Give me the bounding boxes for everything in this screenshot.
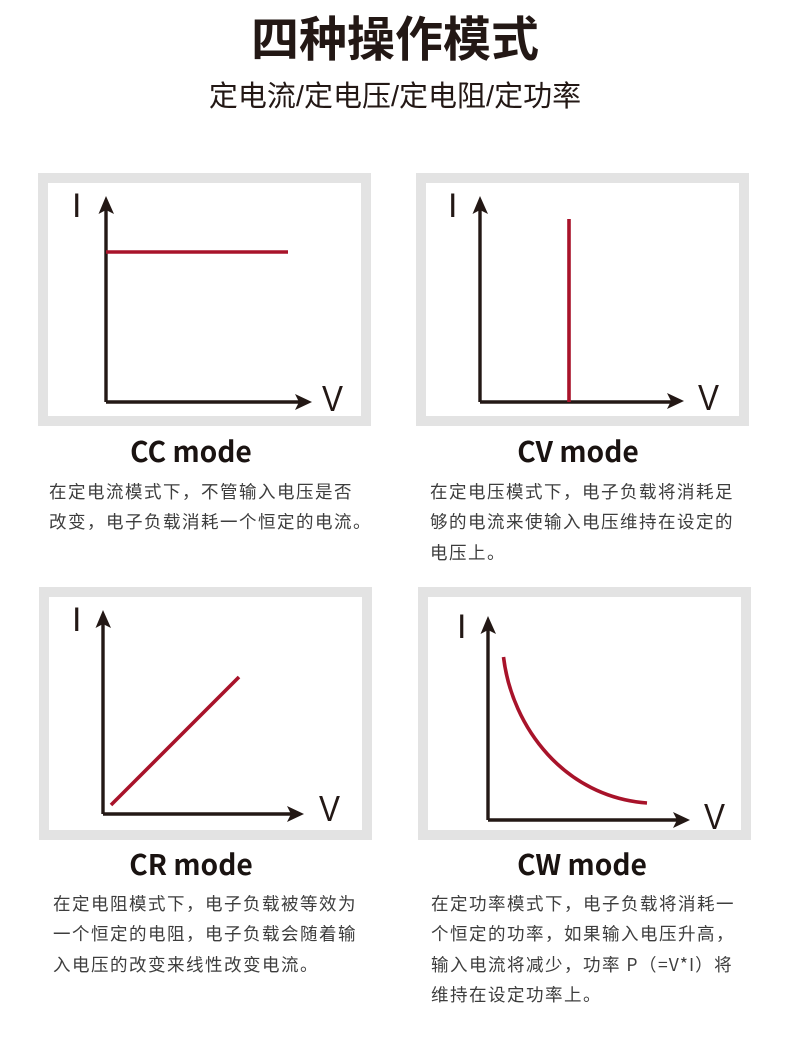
panel: CW chart (418, 587, 751, 840)
heading: CC mode: CC mode (130, 430, 252, 471)
text: CR description: 在定电阻模式下，电子负载被等效为 (53, 891, 357, 916)
text: CW description: 输入电流将减少，功率 P（=V*I）将 (431, 952, 733, 977)
text: CC description (49, 479, 372, 534)
subtitle: 定电流/定电压/定电阻/定功率 (209, 81, 581, 113)
chart: CR mode curve: V (319, 788, 340, 829)
chart: CC mode curve: V (322, 378, 343, 419)
text: CC description: 在定电流模式下，不管输入电压是否 (49, 479, 353, 504)
heading: CV mode: CV mode (517, 430, 639, 471)
text: CW description: 在定功率模式下，电子负载将消耗一 (431, 891, 735, 916)
chart: CR mode curve: I (72, 601, 81, 639)
text: CR description: 入电压的改变来线性改变电流。 (53, 952, 319, 977)
text: CW description: 维持在设定功率上。 (431, 982, 602, 1007)
panel: CR chart (39, 587, 372, 840)
title: 四种操作模式 (251, 14, 539, 67)
chart: CW mode curve: V (704, 796, 725, 837)
text: CV description (430, 479, 734, 565)
text: CC description: 改变，电子负载消耗一个恒定的电流。 (49, 509, 372, 534)
heading: CR mode: CR mode (129, 843, 253, 884)
panel: CC chart (38, 173, 371, 426)
text: CR description: 一个恒定的电阻，电子负载会随着输 (53, 921, 357, 946)
chart: CW mode curve: I (457, 608, 466, 646)
text: CR description (53, 891, 357, 977)
text: CV description: 电压上。 (430, 540, 506, 565)
text: CV description: 在定电压模式下，电子负载将消耗足 (430, 479, 734, 504)
panel: CV chart (416, 173, 749, 426)
chart: CV mode curve: I (448, 187, 457, 225)
text: CW description: 个恒定的功率，如果输入电压升高， (431, 921, 735, 946)
text: CW description (431, 891, 735, 1007)
heading: CW mode: CW mode (517, 843, 647, 884)
chart: CC mode curve: I (72, 187, 81, 225)
chart: CV mode curve: V (698, 377, 719, 418)
text: CV description: 够的电流来使输入电压维持在设定的 (430, 509, 734, 534)
